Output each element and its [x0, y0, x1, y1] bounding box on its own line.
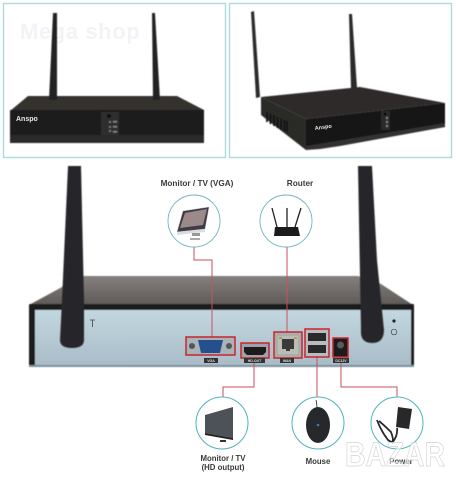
port: HD output — [241, 343, 269, 358]
brand label: Anspo — [16, 116, 38, 123]
port: VGA — [186, 337, 235, 355]
panel: angled view of recorder — [230, 4, 452, 158]
antenna: left — [60, 166, 84, 348]
recorder front — [10, 13, 204, 143]
brand label: Anspo — [314, 124, 333, 132]
connector lines — [194, 247, 397, 397]
port: DC 12V — [333, 338, 348, 357]
device: monitor VGA — [168, 195, 220, 247]
device: power adapter — [371, 397, 423, 449]
panel: front view of recorder — [4, 4, 226, 158]
port labels: DC12V — [335, 359, 347, 363]
port labels: VGA — [207, 359, 215, 363]
port labels — [204, 358, 349, 363]
label: Power: Power — [389, 457, 413, 466]
label: Router: Router — [287, 179, 314, 188]
recorder angled — [251, 11, 445, 150]
panel: rear connection diagram — [29, 166, 423, 472]
device: router — [260, 195, 312, 247]
port labels: HD-OUT — [248, 359, 262, 363]
label: Monitor / TV (VGA): Monitor / TV (VGA) — [161, 179, 234, 188]
antenna: right — [358, 166, 384, 343]
port: USB — [305, 329, 329, 357]
label: Monitor / TV (HD output): Monitor / TV — [200, 454, 246, 463]
recorder rear body — [29, 276, 414, 367]
panel marks — [90, 319, 397, 335]
watermark: Mega shop: Mega shop — [20, 19, 140, 44]
label: Mouse: Mouse — [306, 457, 331, 466]
device: TV — [196, 397, 248, 449]
label: Monitor / TV (HD output): (HD output) — [202, 463, 245, 472]
port labels: WAN — [283, 359, 292, 363]
port: LAN — [274, 332, 302, 358]
device: mouse — [292, 397, 344, 449]
